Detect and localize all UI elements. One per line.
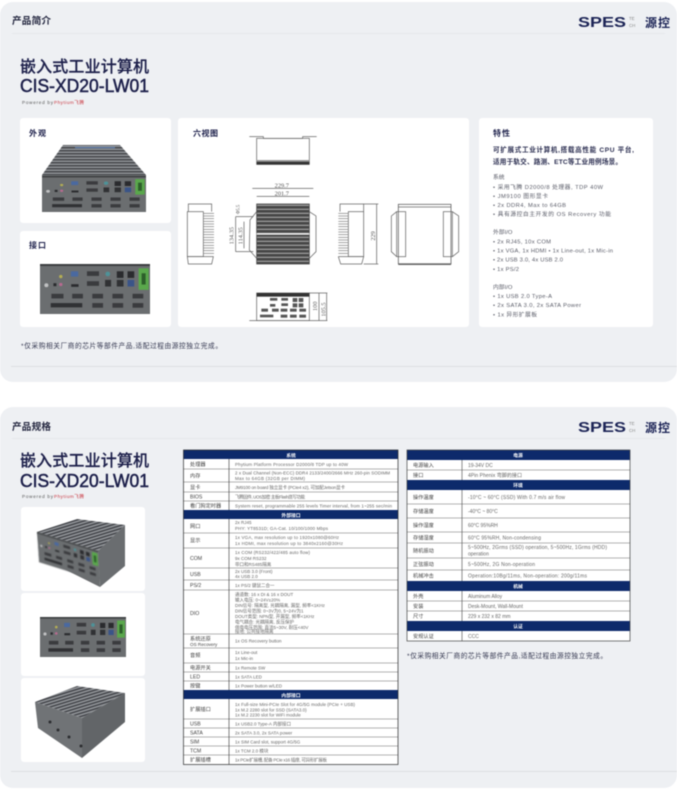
drawing: top view — [249, 137, 317, 165]
table group: environment: 60°C 95%RH, Non-condensing — [468, 536, 541, 542]
panel: six views drawing — [178, 118, 469, 327]
panel: specifications — [0, 407, 677, 788]
table group: external interfaces: 音频 — [190, 651, 201, 659]
powered by line: Phytium飞腾 — [54, 493, 84, 500]
table group: certification: 安规认证 — [413, 632, 434, 640]
table group: external interfaces: 4x USB 2.0 — [235, 574, 258, 579]
table group: environment: 随机振动 — [413, 546, 434, 554]
table group: internal interfaces: 扩展插口 — [190, 705, 211, 713]
table group: mechanical: 外壳 — [413, 592, 423, 600]
drawing: port view — [249, 293, 327, 321]
list: external IO: • 2x RJ45, 10x COM — [493, 240, 551, 246]
list: system — [493, 173, 611, 218]
powered by line — [22, 493, 84, 500]
list: internal IO: • 1x 异形扩展板 — [493, 310, 537, 318]
list: external IO: 外部I/O — [493, 228, 513, 236]
table group: internal interfaces: 1x M.2 2280 slot for SSD (SATA3.0) — [235, 708, 307, 712]
table group: mechanical: Desk-Mount, Wall-Mount — [468, 604, 523, 610]
logo: SPES TECH: CH — [629, 23, 635, 28]
table group: external interfaces: 供电电压范围: 直流5~30V, 耐压<40V — [235, 624, 308, 631]
table group: mechanical: 机械 — [513, 583, 523, 590]
drawing: right side view — [338, 204, 378, 264]
table: left specifications — [184, 450, 398, 764]
list: system: • 具有源控自主开发的 OS Recovery 功能 — [493, 210, 611, 218]
table group: external interfaces: DOUT类型: NPN型, 开漏型, 频率<1KHz — [235, 613, 315, 620]
table group: environment — [413, 482, 607, 580]
table group: external interfaces: 1x HDMI, max resolution up to 3840x2160@30Hz — [235, 541, 344, 546]
logo: SPES TECH: TE — [629, 421, 635, 426]
table group: environment: 5~500Hz, 2G Non-operation — [468, 562, 535, 568]
table group: external interfaces: 1x OS Recovery button — [235, 638, 282, 644]
table group: external interfaces: 接地: 公共接地隔离 — [235, 628, 274, 635]
table group: environment: 操作湿度 — [413, 521, 434, 529]
table group: external interfaces: LED — [190, 674, 200, 680]
list: internal IO: • 2x SATA 3.0, 2x SATA Power — [493, 303, 581, 309]
table group: environment: 操作温度 — [413, 493, 434, 501]
table group: internal interfaces — [190, 692, 356, 764]
table group: external interfaces: 1x VGA, max resolution up to 1920x1080@60Hz — [235, 535, 340, 540]
table group: external interfaces: 外部接口 — [281, 512, 301, 519]
table group: system: Phytium Platform Processor D2000/8 TDP up to 40W — [235, 462, 349, 467]
drawing: port view: 105.5 — [320, 302, 327, 317]
heading: section name: 产品简介 — [12, 15, 51, 27]
image: device perspective — [42, 145, 146, 212]
table group: external interfaces: 电气耦合: 光耦隔离, 反压保护 — [235, 618, 294, 626]
image card: device front — [21, 593, 145, 676]
list: internal IO — [493, 283, 581, 318]
table group: certification — [413, 623, 523, 640]
table group: system: System reset, programmable 255 levels Timer interval, from 1~255 sec/min — [235, 504, 392, 508]
powered by line: Powered by — [22, 100, 54, 105]
table group: internal interfaces: 2x SATA 3.0, 2x SATA power — [235, 730, 293, 736]
table group: external interfaces: 按键 — [190, 682, 200, 690]
table group: external interfaces: 显示 — [190, 537, 200, 544]
powered by line: Powered by — [22, 494, 54, 499]
table group: mechanical: 尺寸 — [413, 612, 423, 620]
table group: system: 看门狗定时器 — [190, 502, 222, 510]
table group: internal interfaces: 1x SIM Card slot, support 4G/5G — [235, 740, 301, 744]
table group: certification: CCC — [468, 634, 479, 640]
table group: external interfaces: PHY: YT8531D; GA-Cat. 10/100/1000 Mbps — [235, 526, 329, 531]
text: summary: 可扩展式工业计算机,搭载高性能 CPU 平台, — [493, 145, 634, 154]
table group: mechanical — [413, 583, 523, 620]
table: right specifications — [407, 450, 630, 641]
list: internal IO: • 1x USB 2.0 Type-A — [493, 294, 552, 300]
dimensions: heights: 114.35 — [237, 227, 244, 244]
table group: external interfaces: 带口和RS485隔离 — [235, 561, 272, 568]
table group: external interfaces: USB — [190, 572, 201, 578]
table group: system: 飞腾固件, UOS加密 主板Flash烧写功能 — [235, 494, 306, 500]
table group: environment: Operation:10Bg/11ms, Non-operation: 200g/11ms — [468, 574, 588, 580]
panel: features — [479, 118, 653, 327]
table group: certification: 认证 — [513, 623, 523, 630]
table group: external interfaces: 2x RJ45 — [235, 520, 252, 525]
dimensions: heights: 134.35 — [229, 227, 236, 244]
footnote: *仅采购相关厂商的芯片等部件产品,适配过程由源控独立完成。 — [21, 341, 222, 350]
table group: internal interfaces: 1x TCM 2.0 模块 — [235, 748, 269, 754]
logo: SPES TECH: 源控 — [645, 420, 670, 435]
panel: appearance — [20, 118, 171, 223]
table group: environment: 环境 — [513, 482, 523, 489]
heading: features: 特性 — [493, 128, 510, 138]
table group: external interfaces: 2x USB 3.0 (Front) — [235, 569, 273, 574]
dimensions: heights: Φ5.5 — [236, 204, 241, 214]
title — [20, 451, 149, 491]
table group: system: Max to 64GB (32GB per DIMM) — [235, 476, 306, 481]
table group: external interfaces: 网口 — [190, 523, 200, 530]
table group: system: BIOS — [190, 494, 203, 500]
logo: SPES TECH: TE — [629, 16, 635, 21]
list: system: • JM9100 图形显卡 — [493, 192, 548, 200]
table group: internal interfaces: USB — [190, 722, 201, 728]
table group: internal interfaces: 1x PCIe扩展槽, 配备 PCIe x16 插座, 可异形扩展板 — [235, 756, 328, 764]
table group: environment: -10°C ~ 60°C (SSD) With 0.7 m/s air flow — [468, 495, 565, 501]
table group: external interfaces: 电源开关 — [190, 664, 211, 672]
table group: external interfaces: 输入电压: 0~24V±20% — [235, 596, 280, 604]
title — [20, 57, 149, 96]
title: CIS-XD20-LW01 — [20, 471, 149, 491]
text: summary: 适用于轨交、路测、ETC等工业用例场景。 — [493, 157, 622, 166]
table group: external interfaces: DIN信号范围: 0~3V为0, 5~24V为1 — [235, 608, 304, 614]
list: external IO: • 1x PS/2 — [493, 267, 519, 273]
table group: internal interfaces: TCM — [190, 748, 201, 754]
dimensions: widths — [252, 182, 313, 197]
table group: internal interfaces: 1x Full-size Mini-PCIe Slot for 4G/5G module (PCIe + USB) — [235, 702, 356, 707]
table group: external interfaces: DIO — [190, 611, 199, 617]
table group: external interfaces — [190, 512, 344, 690]
table group: system: 2 x Dual Channel (Non-ECC) DDR4 2133/2400/2666 MHz 260-pin SODIMM — [235, 470, 390, 476]
table group: environment: operation — [468, 552, 489, 558]
table group: power: 19-34V DC — [468, 463, 493, 469]
image card: device ports perspective — [21, 507, 145, 591]
table group: system — [190, 452, 392, 510]
table group: internal interfaces: SIM — [190, 740, 199, 746]
logo: SPES TECH: SPES — [578, 420, 626, 436]
panel: product overview — [0, 2, 677, 382]
table group: external interfaces: 9x COM RS232 — [235, 556, 267, 561]
image: front panel ports — [39, 263, 151, 315]
table group: environment: 60°C 95%RH — [468, 523, 498, 529]
table group: external interfaces: 1x PS/2 键鼠二合一 — [235, 582, 275, 589]
list: system: • 2x DDR4, Max to 64GB — [493, 203, 566, 209]
table group: system: JM9100 on board 独立显卡 (PCIe4 x2), 可加配Jetson显卡 — [235, 484, 346, 491]
list: system: • 采用飞腾 D2000/8 处理器, TDP 40W — [493, 183, 604, 191]
table group: mechanical: 安装 — [413, 602, 423, 610]
table group: mechanical: Aluminum Alloy — [468, 594, 503, 600]
logo: SPES TECH: SPES — [578, 15, 626, 31]
logo: SPES TECH: CH — [629, 428, 635, 433]
drawing: port view: 100 — [312, 301, 319, 311]
table group: external interfaces: COM — [190, 556, 202, 562]
powered by line — [22, 99, 84, 106]
table group: external interfaces: 1x COM (RS232/422/485 auto flow) — [235, 550, 310, 555]
drawing: left view — [187, 204, 214, 264]
table group: external interfaces: 1x Mic-in — [235, 656, 253, 661]
table group: system: 系统 — [286, 452, 296, 459]
dimensions: widths: 201.7 — [275, 190, 289, 197]
dimensions: heights — [229, 204, 253, 252]
panel: interfaces — [20, 231, 171, 327]
table group: environment: 存储温度 — [413, 507, 434, 515]
table group: power — [413, 452, 523, 479]
image card: device rear perspective — [21, 678, 145, 762]
table group: internal interfaces: 1x M.2 2230 slot for WiFi module — [235, 712, 301, 718]
logo: SPES TECH — [578, 420, 670, 436]
table group: system: 内存 — [190, 472, 200, 480]
title: CIS-XD20-LW01 — [20, 76, 149, 96]
table group: external interfaces: 通道数: 16 x DI & 16 x DOUT — [235, 591, 294, 598]
table group: internal interfaces: SATA — [190, 730, 203, 736]
heading: section name: 产品规格 — [12, 421, 51, 433]
table group: external interfaces: 1x Line-out — [235, 650, 258, 655]
table group: power: 电源输入 — [413, 461, 434, 469]
table group: external interfaces: 1x SATA LED — [235, 674, 263, 680]
table group: environment: 正弦振动 — [413, 560, 434, 568]
drawing: centre view with fins — [249, 182, 316, 264]
text: summary — [493, 145, 634, 166]
list: system: 系统 — [493, 173, 505, 181]
table group: external interfaces: 系统还原 — [190, 634, 211, 642]
heading: six views: 六视图 — [193, 128, 218, 138]
table group: power: 电源 — [513, 452, 523, 459]
table group: external interfaces: OS Recovery — [190, 642, 218, 647]
table group: external interfaces: 1x Power button w/LED — [235, 684, 283, 688]
table group: mechanical: 229 x 232 x 82 mm — [468, 614, 511, 620]
table group: system: 显卡 — [190, 483, 200, 491]
list: internal IO: 内部I/O — [493, 283, 513, 291]
heading: appearance: 外观 — [29, 128, 46, 138]
table group: internal interfaces: 扩展插槽 — [190, 756, 211, 764]
table group: environment: 存储湿度 — [413, 534, 434, 542]
logo: SPES TECH: 源控 — [645, 15, 670, 30]
table group: internal interfaces: 1x USB2.0 Type-A 内部接口 — [235, 720, 291, 728]
footnote: *仅采购相关厂商的芯片等部件产品,适配过程由源控独立完成。 — [407, 651, 607, 660]
drawing: right side view: 229 — [370, 231, 377, 241]
drawing: rear view — [391, 204, 459, 265]
title: 嵌入式工业计算机 — [20, 57, 149, 76]
title: 嵌入式工业计算机 — [20, 451, 149, 470]
powered by line: Phytium飞腾 — [54, 99, 84, 106]
list: external IO: • 1x VGA, 1x HDMI • 1x Line-out, 1x Mic-in — [493, 248, 613, 254]
table group: power: 接口 — [413, 471, 423, 479]
table group: environment: 机械冲击 — [413, 572, 434, 580]
table group: external interfaces: DIN信号: 隔离型, 光耦隔离, 漏型, 频率<1KHz — [235, 602, 326, 609]
table group: system: 处理器 — [190, 460, 206, 468]
heading: interfaces: 接口 — [29, 240, 46, 250]
table group: external interfaces: PS/2 — [190, 583, 201, 589]
table group: environment: 5~500Hz, 2Grms (SSD) operation, 5~500Hz, 1Grms (HDD) — [468, 545, 607, 551]
dimensions: widths: 229.7 — [275, 182, 289, 189]
list: external IO — [493, 228, 613, 273]
table group: environment: -40°C ~ 80°C — [468, 509, 498, 515]
table group: external interfaces: 1x Remote SW — [235, 666, 266, 670]
table group: power: 4Pin Phenix 弯脚的接口 — [468, 472, 522, 479]
table group: internal interfaces: 内部接口 — [281, 692, 301, 699]
logo: SPES TECH — [578, 15, 670, 31]
list: external IO: • 2x USB 3.0, 4x USB 2.0 — [493, 258, 563, 264]
